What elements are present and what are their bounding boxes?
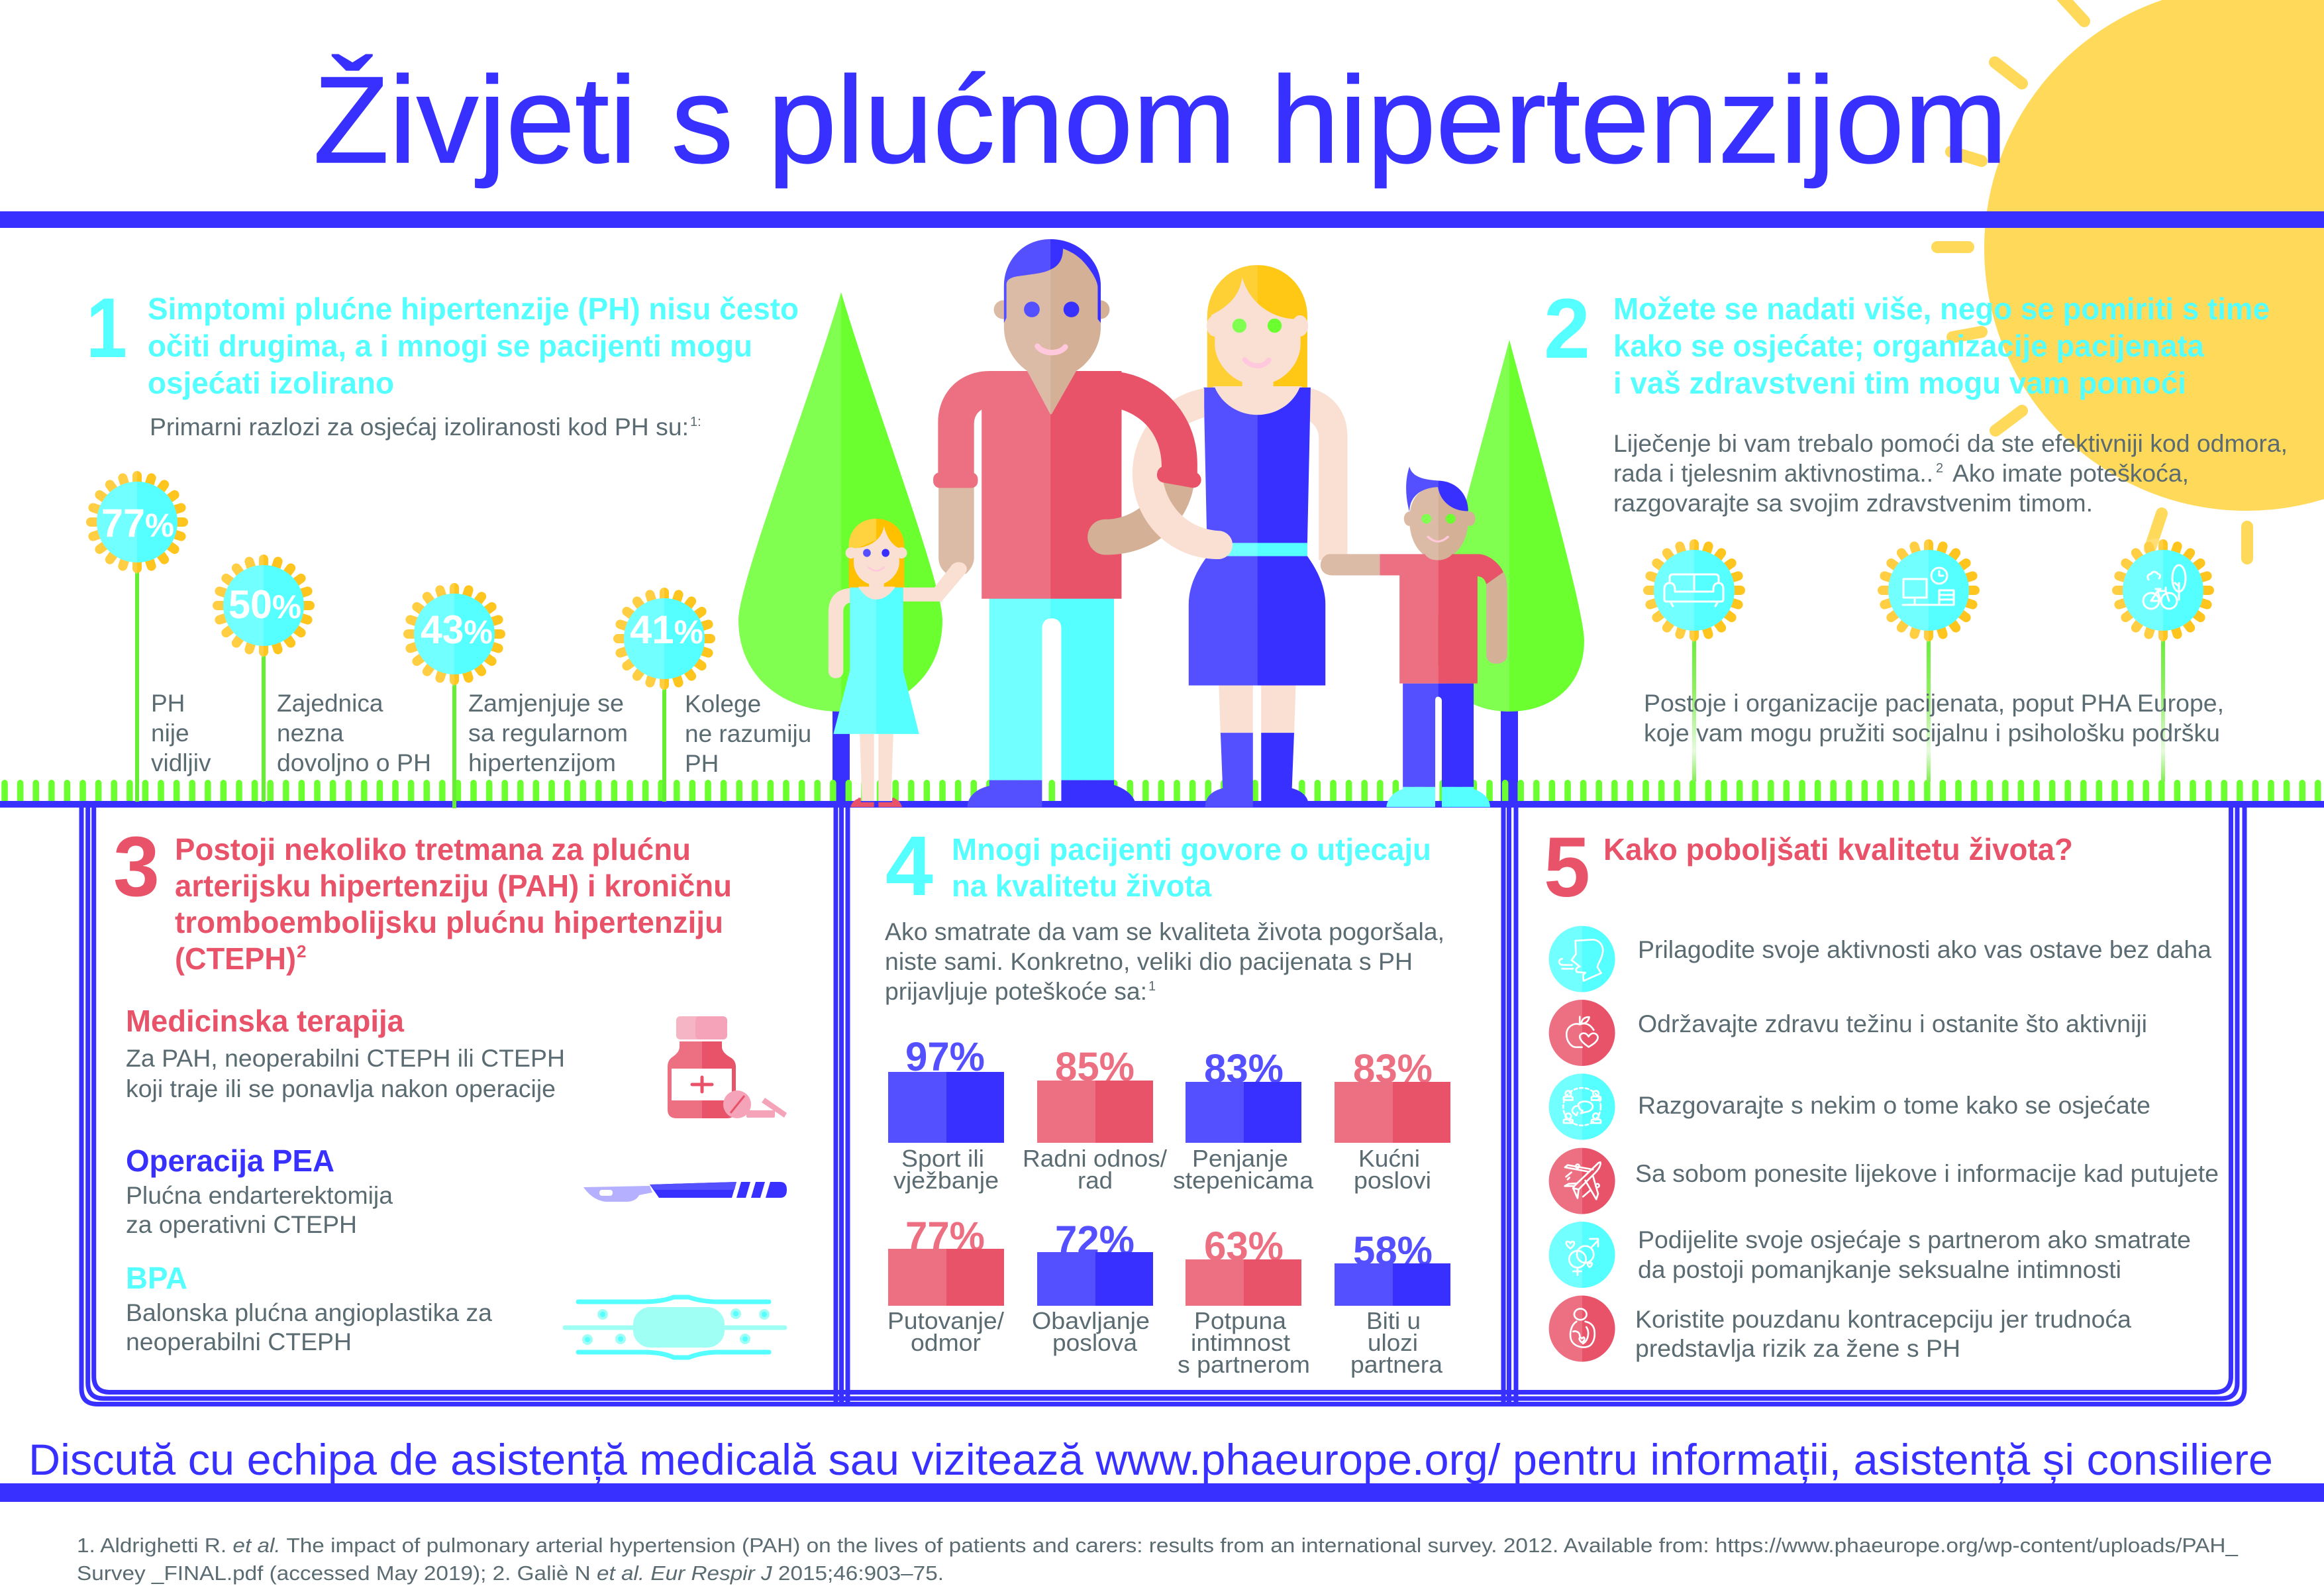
label: Kolege: Kolege — [685, 690, 761, 717]
tip 6 pregnancy: predstavlja rizik za žene s PH — [1635, 1335, 1960, 1362]
tip 4 airplane — [1549, 1148, 2219, 1214]
bar: 63% intimacy: intimnost — [1191, 1329, 1290, 1356]
bar: 63% intimacy: s partnerom — [1178, 1351, 1310, 1378]
intro text — [885, 918, 1444, 1005]
tip 3 conversation: Razgovarajte s nekim o tome kako se osjećate — [1638, 1092, 2150, 1119]
flower 50%: 50% — [228, 582, 301, 627]
label: Zajednica: Zajednica — [277, 690, 383, 717]
flower icon: bicycle and tree — [2111, 538, 2214, 782]
operation PEA text: Plućna endarterektomija — [126, 1182, 393, 1209]
flower 77% — [85, 470, 188, 802]
bar: 97% sport: 97% — [905, 1034, 985, 1079]
number 3: 3 — [113, 820, 160, 914]
label: Zajednica — [277, 690, 431, 776]
medical therapy text: Za PAH, neoperabilni CTEPH ili CTEPH — [126, 1045, 565, 1072]
number 2: 2 — [1544, 282, 1590, 376]
tip 2 apple and heart: Održavajte zdravu težinu i ostanite što aktivniji — [1638, 1010, 2147, 1037]
bar: 72% errands: poslova — [1052, 1329, 1138, 1356]
body text: Ako imate poteškoća, — [1952, 460, 2189, 487]
bar: 77% travel: Putovanje/ — [887, 1307, 1004, 1334]
flower 77%: 77% — [101, 501, 174, 545]
intro line: Primarni razlozi za osjećaj izoliranosti kod PH su: — [150, 413, 689, 441]
grass strip — [0, 780, 2324, 802]
label: PH nije vidljiv — [151, 690, 211, 776]
heading 5: Kako poboljšati kvalitetu života? — [1603, 832, 2073, 867]
heading 3: tromboembolijsku plućnu hipertenziju — [175, 905, 723, 939]
title: Živjeti s plućnom hipertenzijom — [313, 52, 2007, 189]
heading 3: Postoji nekoliko tretmana za plućnu — [175, 832, 691, 867]
bar: 85% work: 85% — [1055, 1044, 1135, 1089]
bar: 97% sport — [888, 1034, 1004, 1194]
tip 5 intimacy symbols — [1549, 1222, 2191, 1288]
panel: section 3 treatments — [113, 820, 787, 1357]
bar: 63% intimacy: Potpuna — [1194, 1307, 1287, 1334]
number 1: 1 — [86, 281, 127, 376]
medical therapy text: Medicinska terapija — [126, 1004, 404, 1038]
operation PEA text: za operativni CTEPH — [126, 1211, 357, 1238]
ground line — [0, 801, 2324, 808]
panel frames — [81, 805, 2245, 1404]
bar: 72% errands: 72% — [1055, 1218, 1135, 1263]
BPA text: Balonska plućna angioplastika za — [126, 1299, 492, 1326]
bar: 72% errands — [1032, 1218, 1153, 1356]
panel: section 4 quality of life — [885, 819, 1450, 1378]
flower 41% — [612, 586, 715, 802]
tip 4 airplane: Sa sobom ponesite lijekove i informacije kad putujete — [1635, 1160, 2219, 1187]
flower icon: desk and clock — [1876, 538, 1980, 782]
bar: 58% partner role: Biti u — [1366, 1307, 1421, 1334]
label: Zajednica: nezna — [277, 719, 344, 747]
icon: medicine bottle and pills — [668, 1016, 787, 1118]
bar: 72% errands: Obavljanje — [1032, 1307, 1150, 1334]
flower icon: sofa — [1642, 538, 1745, 782]
flower 50% — [211, 553, 315, 802]
intro line: 1: — [690, 415, 701, 429]
number 5: 5 — [1544, 820, 1590, 915]
label: Zamjenjuje — [468, 690, 628, 776]
bar: 83% stairs: 83% — [1204, 1046, 1284, 1091]
bar: 77% travel: 77% — [905, 1214, 985, 1259]
bar: 85% work — [1023, 1044, 1167, 1194]
heading 3: (CTEPH) — [175, 941, 296, 976]
heading 3: arterijsku hipertenziju (PAH) i kroničnu — [175, 869, 732, 903]
heading 1: Simptomi plućne hipertenzije (PH) nisu često — [148, 291, 799, 326]
BPA text: neoperabilni CTEPH — [126, 1328, 352, 1355]
icon: balloon angioplasty vessel — [565, 1297, 785, 1357]
label: PH nije vidljiv: nije — [151, 719, 189, 747]
label: Kolege: PH — [685, 750, 719, 777]
body text: Liječenje bi vam trebalo pomoći da ste efektivniji kod odmora, — [1613, 430, 2288, 457]
bar: 58% partner role: 58% — [1353, 1228, 1433, 1273]
BPA text — [126, 1261, 492, 1355]
label: Kolege: ne razumiju — [685, 720, 811, 747]
patient organisations text — [1644, 690, 2224, 747]
patient organisations text: koje vam mogu pružiti socijalnu i psihološku podršku — [1644, 719, 2220, 747]
label: Zajednica: dovoljno o PH — [277, 749, 431, 776]
heading 1 — [148, 291, 799, 400]
left tree — [738, 292, 942, 802]
intro text: Ako smatrate da vam se kvaliteta života pogoršala, — [885, 918, 1444, 945]
tip 5 intimacy symbols: da postoji pomanjkanje seksualne intimnosti — [1638, 1256, 2121, 1283]
bar: 58% partner role — [1335, 1228, 1450, 1378]
heading 2: Možete se nadati više, nego se pomiriti s time — [1613, 291, 2270, 326]
bar: 58% partner role: ulozi — [1368, 1329, 1418, 1356]
bar: 85% work: rad — [1078, 1167, 1113, 1194]
tip 2 apple and heart — [1549, 1000, 2147, 1066]
boy — [1321, 466, 1507, 807]
bar: 83% stairs: stepenicama — [1173, 1167, 1314, 1194]
bar: 77% travel — [887, 1214, 1004, 1356]
label: Zamjenjuje: hipertenzijom — [468, 749, 616, 776]
section 2 — [1544, 282, 2288, 782]
bar: 83% housework: poslovi — [1354, 1167, 1431, 1194]
flower 43%: 43% — [421, 608, 493, 652]
flower 41%: 41% — [630, 608, 703, 652]
heading 1: osjećati izolirano — [148, 366, 394, 400]
references: Survey _FINAL.pdf (accessed May 2019); 2. Galiè N et al. Eur Respir J 2015;46:903–75. — [77, 1562, 944, 1585]
operation PEA text — [126, 1143, 393, 1238]
body text: razgovarajte sa svojim zdravstvenim timom. — [1613, 490, 2093, 517]
heading 2: i vaš zdravstveni tim mogu vam pomoći — [1613, 366, 2186, 400]
body text: rada i tjelesnim aktivnostima.. — [1613, 460, 1933, 487]
heading 4: na kvalitetu života — [952, 869, 1211, 903]
bar: 58% partner role: partnera — [1350, 1351, 1443, 1378]
bar: 97% sport: Sport ili — [901, 1145, 984, 1172]
tip 6 pregnancy — [1549, 1296, 2131, 1362]
tip 6 pregnancy: Koristite pouzdanu kontracepciju jer trudnoća — [1635, 1306, 2131, 1333]
medical therapy text — [126, 1004, 565, 1102]
call to action: Discută cu echipa de asistență medicală sau vizitează www.phaeurope.org/ pentru informații, asistență și consiliere — [28, 1435, 2273, 1484]
bar: 63% intimacy — [1178, 1224, 1310, 1378]
label: Kolege — [685, 690, 811, 777]
right tree — [1435, 340, 1584, 802]
number 4: 4 — [885, 819, 933, 914]
bar: 97% sport: vježbanje — [893, 1167, 999, 1194]
section 1 — [85, 281, 811, 808]
bar: 63% intimacy: 63% — [1204, 1224, 1284, 1269]
label: Zamjenjuje: sa regularnom — [468, 719, 628, 747]
patient organisations text: Postoje i organizacije pacijenata, poput PHA Europe, — [1644, 690, 2224, 717]
references: 1. Aldrighetti R. et al. The impact of pulmonary arterial hypertension (PAH) on the lives of patients and carers: results from an international survey. 2012. Available from: https://www.phaeurope.org/wp-content/uploads/PAH_ — [77, 1534, 2239, 1557]
icon: scalpel — [583, 1182, 787, 1202]
bottom bar — [0, 1483, 2324, 1502]
intro text: niste sami. Konkretno, veliki dio pacijenata s PH — [885, 948, 1413, 975]
heading 3: 2 — [297, 941, 306, 961]
flower 43% — [402, 582, 505, 808]
heading 2 — [1613, 291, 2270, 400]
tip 5 intimacy symbols: Podijelite svoje osjećaje s partnerom ako smatrate — [1638, 1226, 2191, 1253]
operation PEA text: Operacija PEA — [126, 1143, 334, 1178]
top divider bar — [0, 211, 2324, 228]
heading 1: očiti drugima, a i mnogi se pacijenti mogu — [148, 329, 752, 363]
woman — [1076, 265, 1347, 807]
label: Zamjenjuje: Zamjenjuje se — [468, 690, 624, 717]
bar: 77% travel: odmor — [911, 1329, 981, 1356]
bar: 83% stairs — [1173, 1046, 1314, 1194]
heading 4: Mnogi pacijenti govore o utjecaju — [952, 832, 1431, 867]
man — [933, 239, 1136, 807]
sun with rays — [1937, 0, 2324, 558]
bar: 85% work: Radni odnos/ — [1023, 1145, 1167, 1172]
body text: 2 — [1936, 461, 1943, 476]
label: PH nije vidljiv: vidljiv — [151, 749, 211, 776]
family illustration — [829, 239, 1507, 807]
bar: 83% housework — [1335, 1046, 1450, 1194]
BPA text: BPA — [126, 1261, 187, 1295]
bar: 83% stairs: Penjanje — [1192, 1145, 1288, 1172]
tip 1 breath — [1549, 926, 2211, 992]
label: PH nije vidljiv: PH — [151, 690, 185, 717]
intro text: 1 — [1148, 979, 1156, 994]
intro text: prijavljuje poteškoće sa: — [885, 978, 1147, 1005]
heading 4 — [952, 832, 1431, 903]
references — [77, 1534, 2239, 1585]
body text — [1613, 430, 2288, 517]
bar: 83% housework: 83% — [1353, 1046, 1433, 1091]
tip 1 breath: Prilagodite svoje aktivnosti ako vas ostave bez daha — [1638, 936, 2211, 963]
medical therapy text: koji traje ili se ponavlja nakon operacije — [126, 1075, 556, 1102]
heading 3 — [175, 832, 732, 976]
girl — [829, 519, 967, 807]
heading 2: kako se osjećate; organizacije pacijenata — [1613, 329, 2204, 363]
panel: section 5 improving quality of life — [1544, 820, 2219, 1362]
bar: 83% housework: Kućni — [1358, 1145, 1420, 1172]
tip 3 conversation — [1549, 1073, 2150, 1139]
